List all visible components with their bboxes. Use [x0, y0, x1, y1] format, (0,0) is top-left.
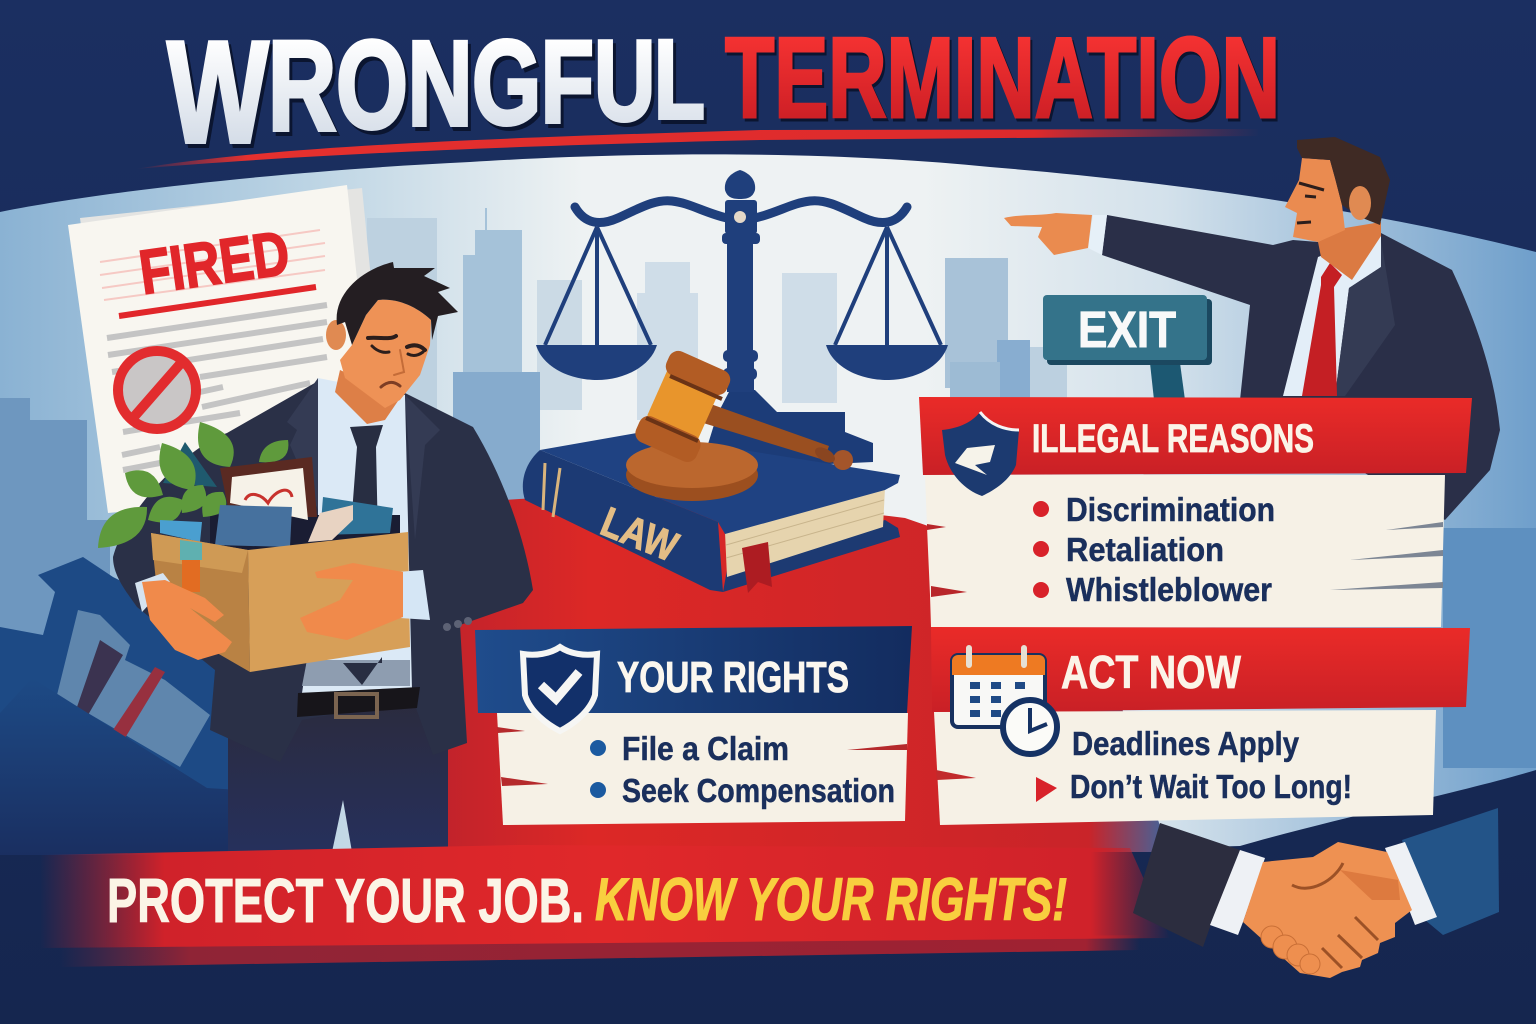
boss features — [1297, 183, 1324, 223]
list: your rights: File a Claim — [622, 730, 789, 767]
left sleeve — [1133, 823, 1240, 947]
title word: WRONGFUL: R — [268, 14, 336, 157]
title shadow: WRONGFUL: U — [597, 22, 658, 149]
exit sign — [1043, 295, 1212, 400]
title underline swoosh — [135, 129, 1258, 169]
clasped hands — [1243, 842, 1412, 978]
ear — [326, 320, 346, 350]
title shadow: WRONGFUL: O — [339, 19, 411, 159]
title word: WRONGFUL: N — [408, 16, 472, 151]
left hand — [135, 573, 170, 612]
city skyline — [0, 208, 1536, 768]
illegal reasons header — [919, 397, 1472, 496]
right hand — [397, 570, 430, 620]
tie — [343, 425, 383, 685]
icon: calendar and clock — [952, 648, 1057, 754]
bottom cover — [723, 520, 900, 592]
right cuff — [1385, 842, 1437, 925]
title shadow: WRONGFUL: R — [271, 18, 339, 161]
title word: WRONGFUL: G — [472, 16, 541, 150]
light sky panel — [0, 154, 1536, 850]
scale beam — [575, 201, 907, 223]
jacket — [113, 380, 533, 762]
scale base — [700, 390, 873, 470]
title shadow: TERMINATION: TERMINATION — [727, 18, 1282, 145]
scales of justice — [536, 170, 948, 470]
title shadow: WRONGFUL: N — [411, 20, 475, 155]
list: act now: Deadlines Apply — [1072, 725, 1300, 762]
spine — [523, 450, 723, 592]
boss neck — [1318, 222, 1381, 280]
sad employee — [98, 262, 533, 852]
right pan — [826, 345, 948, 380]
boss cuff — [1088, 215, 1107, 255]
boss hair — [1297, 137, 1390, 225]
your rights header: YOUR RIGHTS — [617, 653, 849, 702]
title word: TERMINATION: TERMINATION — [725, 15, 1280, 142]
title shadow: WRONGFUL: G — [475, 20, 544, 154]
title word: WRONGFUL: W — [167, 12, 269, 174]
title — [167, 12, 1282, 178]
face — [340, 300, 431, 408]
top cover — [540, 433, 900, 534]
boss pointing — [1004, 137, 1500, 520]
fired document — [68, 185, 385, 520]
list: your rights — [590, 730, 895, 809]
pages — [725, 488, 885, 577]
act now header — [931, 627, 1470, 712]
boss shirt — [1283, 233, 1381, 396]
list: act now — [1036, 725, 1352, 805]
left pan — [536, 345, 657, 380]
LAW label: LAW — [595, 498, 685, 571]
title shadow: WRONGFUL: F — [544, 20, 597, 151]
ribbon bookmark — [742, 542, 772, 593]
law book — [523, 348, 900, 593]
left rubble and dark foreground — [0, 557, 240, 855]
boss jacket — [1102, 215, 1500, 520]
trousers — [228, 700, 448, 852]
boss tie — [1302, 263, 1342, 396]
title word: WRONGFUL: U — [594, 18, 655, 145]
title word: WRONGFUL: L — [654, 17, 705, 142]
title word: WRONGFUL: O — [336, 15, 408, 155]
boss lapels — [1335, 240, 1395, 396]
boss face — [1285, 158, 1345, 242]
list: act now: Don’t Wait Too Long! — [1070, 768, 1352, 805]
bottom banner: PROTECT YOUR JOB. — [107, 867, 584, 936]
title shadow: WRONGFUL: L — [657, 21, 708, 146]
box contents — [98, 422, 400, 555]
left cuff — [1210, 850, 1265, 935]
icon: prohibited sign — [118, 351, 196, 429]
icon: shield — [942, 412, 1019, 496]
panel: illegal reasons — [919, 397, 1472, 627]
right sleeve — [1402, 808, 1499, 935]
list: illegal reasons: Retaliation — [1066, 531, 1224, 568]
list: illegal reasons — [1033, 491, 1275, 608]
panel: act now — [931, 627, 1470, 825]
neck — [335, 370, 400, 424]
belt — [297, 687, 420, 717]
panel: your rights — [475, 626, 912, 825]
FIRED stamp text: FIRED — [135, 219, 293, 308]
scale column — [722, 170, 760, 392]
bottom banner: KNOW YOUR RIGHTS! — [595, 866, 1067, 933]
icon: shield check — [523, 647, 597, 731]
title shadow: WRONGFUL: W — [170, 16, 272, 178]
gavel — [626, 348, 853, 501]
facial features — [368, 336, 425, 387]
shirt — [302, 378, 412, 693]
red floor — [448, 497, 1160, 852]
hair — [337, 262, 458, 345]
act now header: ACT NOW — [1061, 646, 1241, 698]
your rights header — [475, 626, 912, 731]
list: illegal reasons: Whistleblower — [1066, 571, 1272, 608]
cardboard box — [151, 532, 410, 672]
list: illegal reasons: Discrimination — [1066, 491, 1275, 528]
boss ear — [1349, 186, 1371, 220]
illegal reasons header: ILLEGAL REASONS — [1032, 417, 1314, 461]
handshake — [1133, 808, 1499, 978]
title word: WRONGFUL: F — [541, 16, 594, 147]
list: your rights: Seek Compensation — [622, 772, 895, 809]
jacket buttons — [443, 617, 472, 631]
scale chains — [545, 227, 941, 345]
pointing hand — [1004, 213, 1092, 255]
lapels — [287, 378, 440, 540]
exit sign: EXIT — [1078, 301, 1176, 358]
bottom banner — [40, 845, 1170, 967]
